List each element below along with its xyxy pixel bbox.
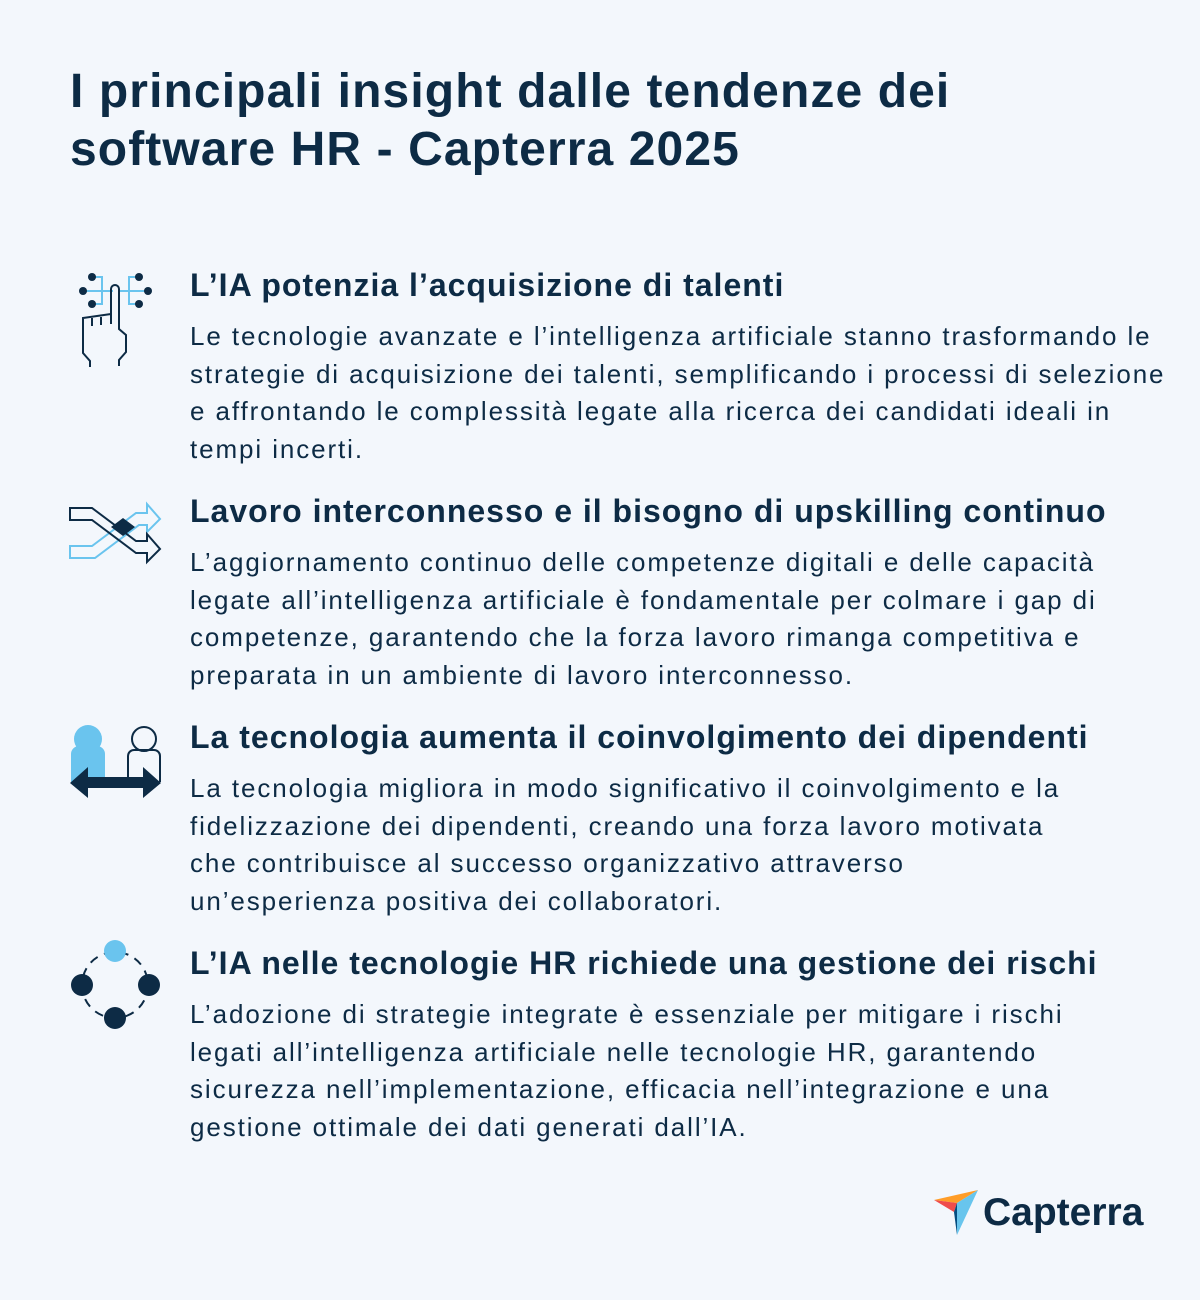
- text 3: fidelizzazione dei dipendenti, creando una forza lavoro motivata: [190, 811, 1044, 841]
- heading 1: L’IA potenzia l’acquisizione di talenti: [190, 267, 784, 303]
- icon: people exchange: [70, 725, 161, 798]
- title: I principali insight dalle tendenze dei: [70, 65, 950, 118]
- text 2: [190, 547, 1097, 690]
- text 3: un’esperienza positiva dei collaboratori.: [190, 886, 723, 916]
- text 1: e affrontando le complessità legate alla ricerca dei candidati ideali in: [190, 396, 1111, 426]
- text 2: L’aggiornamento continuo delle competenze digitali e delle capacità: [190, 547, 1095, 577]
- text 4: gestione ottimale dei dati generati dall’IA.: [190, 1112, 748, 1142]
- icon: crossing arrows: [69, 502, 162, 564]
- text 4: sicurezza nell’implementazione, efficacia nell’integrazione e una: [190, 1074, 1050, 1104]
- heading 3: La tecnologia aumenta il coinvolgimento dei dipendenti: [190, 719, 1089, 755]
- text 4: [190, 999, 1064, 1142]
- text 2: preparata in un ambiente di lavoro interconnesso.: [190, 660, 854, 690]
- text 1: tempi incerti.: [190, 434, 364, 464]
- title: [70, 65, 950, 176]
- text 1: strategie di acquisizione dei talenti, semplificando i processi di selezione: [190, 359, 1165, 389]
- icon: hand with network: [79, 273, 152, 367]
- text 1: Le tecnologie avanzate e l’intelligenza artificiale stanno trasformando le: [190, 321, 1152, 351]
- text 2: competenze, garantendo che la forza lavoro rimanga competitiva e: [190, 622, 1080, 652]
- logo: Capterra: Capterra: [983, 1191, 1143, 1234]
- text 4: legati all’intelligenza artificiale nelle tecnologie HR, garantendo: [190, 1037, 1037, 1067]
- title: software HR - Capterra 2025: [70, 123, 740, 176]
- text 3: [190, 773, 1060, 916]
- text 3: La tecnologia migliora in modo significativo il coinvolgimento e la: [190, 773, 1060, 803]
- text 4: L’adozione di strategie integrate è essenziale per mitigare i rischi: [190, 999, 1064, 1029]
- text 2: legate all’intelligenza artificiale è fondamentale per colmare i gap di: [190, 585, 1097, 615]
- icon: network circle: [71, 940, 160, 1029]
- text 3: che contribuisce al successo organizzativo attraverso: [190, 848, 905, 878]
- text 1: [190, 321, 1165, 464]
- heading 4: L’IA nelle tecnologie HR richiede una gestione dei rischi: [190, 945, 1098, 981]
- heading 2: Lavoro interconnesso e il bisogno di upskilling continuo: [190, 493, 1106, 529]
